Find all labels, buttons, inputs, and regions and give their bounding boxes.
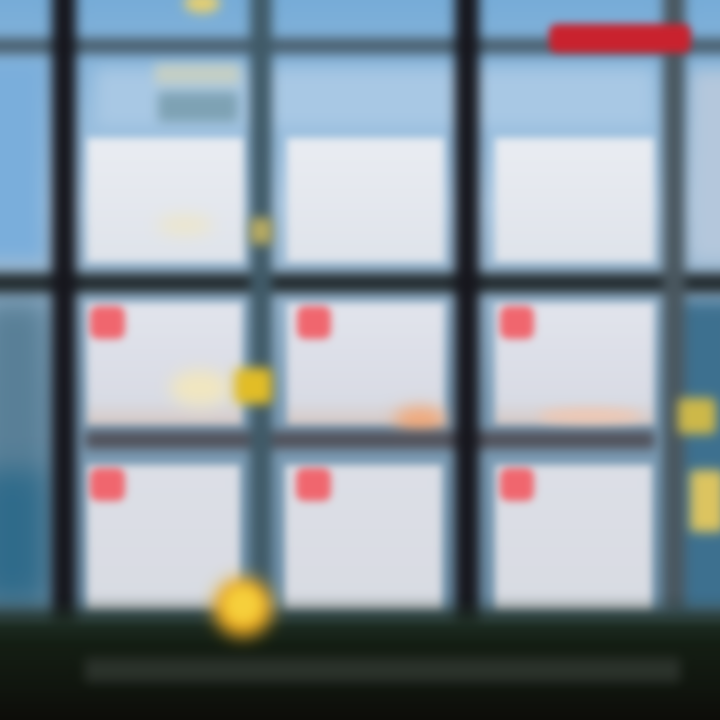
card: middle centre <box>287 303 444 425</box>
grid: vertical bars <box>52 0 685 625</box>
panel: middle row cards <box>87 303 654 425</box>
card: middle right <box>495 303 654 425</box>
highlight: right <box>678 398 716 434</box>
grid: horizontal bars <box>0 38 720 449</box>
card glows: warm tints <box>157 215 642 433</box>
badge 3 <box>500 306 534 339</box>
badge 6 <box>500 468 534 501</box>
icons: yellow highlights <box>234 218 720 532</box>
header block: subtitle strip <box>155 64 240 122</box>
highlight: right tall <box>690 470 720 532</box>
card: bottom left <box>87 465 240 611</box>
icons: red number badges <box>90 306 534 501</box>
badge: red title pill <box>549 24 691 53</box>
badge 1 <box>90 306 125 339</box>
panel: top row cards <box>87 138 654 262</box>
badge 5 <box>296 468 331 501</box>
footer: text strip <box>85 658 680 682</box>
card: middle left <box>87 303 242 425</box>
card: bottom centre <box>285 465 442 611</box>
card: top middle <box>287 138 444 262</box>
card: top left <box>87 138 244 262</box>
icon: top yellow marker <box>184 0 220 13</box>
badge 4 <box>90 468 125 501</box>
card: top right <box>495 138 654 262</box>
highlight: centre left <box>234 368 272 404</box>
icon: glowing yellow circle <box>213 577 273 637</box>
panel: bottom row cards <box>87 465 652 611</box>
highlight: small upper <box>250 218 272 244</box>
background: dark ground <box>0 610 720 720</box>
card: bottom right <box>495 465 652 611</box>
badge 2 <box>297 306 331 339</box>
